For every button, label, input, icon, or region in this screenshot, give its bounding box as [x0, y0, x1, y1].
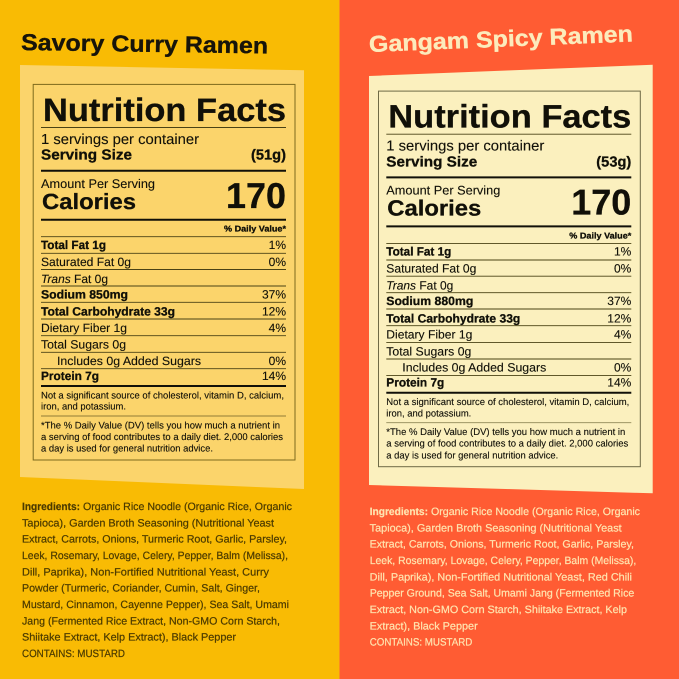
ingredients: Jang (Fermented Rice Extract, Non-GMO Corn Starch, [22, 615, 280, 627]
ingredients: Leek, Rosemary, Lovage, Celery, Pepper, Balm (Melissa), [370, 555, 636, 567]
nutrient rows: 12% [607, 311, 632, 325]
nutrition facts label [33, 84, 295, 460]
footnote: nutrients [386, 397, 629, 419]
footnote: daily value: a day is used for general nutrition advice. [41, 444, 213, 455]
ingredients: Extract, Non-GMO Corn Starch, Shiitake Extract, Kelp [370, 604, 627, 616]
nutrient rows: Sodium 880mg [386, 294, 473, 308]
footnote: daily value [41, 420, 283, 455]
ingredients: Extract), Black Pepper [370, 620, 478, 632]
ingredients: Organic Rice Noodle (Organic Rice, Organic [83, 501, 293, 513]
title: Savory Curry Ramen: Savory Curry Ramen [21, 29, 268, 58]
daily value header: % Daily Value* [569, 230, 632, 240]
ingredients: Powder (Turmeric, Coriander, Cumin, Salt, Ginger, [22, 583, 260, 595]
footnote: daily value: *The % Daily Value (DV) tells you how much a nutrient in [386, 427, 625, 438]
nutrient rows [41, 238, 286, 383]
nutrient rows: Includes 0g Added Sugars [57, 354, 201, 368]
footnote: nutrients: Not a significant source of cholesterol, vitamin D, calcium, [386, 397, 629, 408]
ingredients: Mustard, Cinnamon, Cayenne Pepper), Sea Salt, Umami [22, 599, 289, 611]
heading: Nutrition Facts: Nutrition Facts [43, 92, 286, 128]
footnote: daily value: a day is used for general nutrition advice. [386, 450, 558, 461]
footnote: daily value: *The % Daily Value (DV) tells you how much a nutrient in [41, 420, 280, 431]
ingredients: Ingredients: [370, 506, 428, 518]
calories: Amount Per Serving [41, 177, 155, 191]
footnote: nutrients: Not a significant source of cholesterol, vitamin D, calcium, [41, 390, 284, 401]
nutrient rows: 14% [262, 369, 286, 383]
footnote: nutrients: iron, and potassium. [386, 408, 471, 419]
nutrient rows: Protein 7g [41, 369, 99, 383]
calories [41, 175, 286, 216]
nutrient rows: Total Sugars 0g [41, 338, 126, 352]
nutrient rows: Dietary Fiber 1g [386, 328, 472, 342]
serving info [41, 132, 286, 164]
footnote: daily value: a serving of food contributes to a daily diet. 2,000 calories [41, 432, 283, 443]
panel: Gangam Spicy Ramen [340, 0, 679, 679]
panel: Savory Curry Ramen [0, 0, 340, 679]
ingredients: Organic Rice Noodle (Organic Rice, Organic [431, 506, 641, 518]
calories: Calories [42, 189, 136, 214]
ingredients: Extract, Carrots, Onions, Turmeric Root, Garlic, Parsley, [22, 534, 287, 546]
ingredients: Shiitake Extract, Kelp Extract), Black Pepper [22, 632, 236, 644]
ingredients: Dill, Paprika), Non-Fortified Nutritional Yeast, Red Chili [370, 571, 632, 583]
nutrient rows: Saturated Fat 0g [386, 262, 476, 276]
serving info [386, 139, 631, 170]
serving info: (53g) [596, 154, 631, 170]
nutrient rows: Total Carbohydrate 33g [41, 305, 175, 319]
calories: Amount Per Serving [386, 184, 500, 198]
nutrient rows: Total Fat 1g [386, 245, 451, 259]
nutrient rows: Protein 7g [386, 376, 444, 390]
footnote: daily value: a serving of food contributes to a daily diet. 2,000 calories [386, 439, 628, 450]
ingredients [22, 501, 293, 660]
serving info: 1 servings per container [41, 132, 199, 148]
ingredients: Ingredients: [22, 501, 80, 513]
calories: 170 [571, 182, 631, 223]
footnote: daily value [386, 427, 628, 461]
heading: Nutrition Facts: Nutrition Facts [388, 99, 631, 135]
nutrient rows [386, 245, 632, 390]
footnote: nutrients [41, 390, 284, 413]
nutrient rows: 0% [614, 262, 632, 276]
nutrient rows: Includes 0g Added Sugars [402, 361, 546, 375]
nutrient rows: Saturated Fat 0g [41, 255, 131, 269]
calories: Calories [387, 196, 481, 221]
nutrition facts label [378, 91, 640, 467]
serving info: 1 servings per container [386, 139, 544, 155]
footnote: nutrients: iron, and potassium. [41, 402, 126, 413]
nutrient rows: Dietary Fiber 1g [41, 321, 127, 335]
nutrient rows: Trans Fat 0g [41, 272, 108, 286]
nutrient rows: Total Sugars 0g [386, 344, 471, 358]
nutrient rows: 14% [607, 376, 632, 390]
nutrient rows: 37% [607, 294, 632, 308]
nutrient rows: 4% [269, 321, 286, 335]
nutrient rows: 1% [269, 238, 286, 252]
label background [20, 65, 304, 489]
ingredients: Extract, Carrots, Onions, Turmeric Root, Garlic, Parsley, [370, 539, 634, 551]
nutrient rows: Total Carbohydrate 33g [386, 311, 520, 325]
calories: 170 [226, 175, 286, 216]
label background [369, 65, 653, 493]
ingredients: Tapioca), Garden Broth Seasoning (Nutritional Yeast [22, 517, 274, 529]
ingredients: Tapioca), Garden Broth Seasoning (Nutritional Yeast [370, 522, 622, 534]
nutrient rows: 0% [269, 354, 286, 368]
serving info: (51g) [251, 148, 286, 164]
ingredients [370, 506, 641, 649]
ingredients: CONTAINS: MUSTARD [22, 648, 125, 660]
nutrient rows: 37% [262, 287, 286, 301]
nutrient rows: Total Fat 1g [41, 238, 106, 252]
nutrient rows: 0% [269, 255, 286, 269]
ingredients: Dill, Paprika), Non-Fortified Nutritional Yeast, Curry [22, 566, 270, 578]
ingredients: CONTAINS: MUSTARD [370, 637, 473, 649]
nutrient rows: Sodium 850mg [41, 287, 128, 301]
nutrient rows: Trans Fat 0g [386, 279, 453, 293]
calories [386, 182, 631, 223]
nutrient rows: 12% [262, 305, 286, 319]
nutrient rows: 4% [614, 328, 632, 342]
nutrient rows: 0% [614, 361, 632, 375]
serving info: Serving Size [386, 154, 477, 170]
title: Gangam Spicy Ramen: Gangam Spicy Ramen [368, 20, 633, 57]
daily value header: % Daily Value* [224, 224, 287, 234]
ingredients: Pepper Ground, Sea Salt, Umami Jang (Fermented Rice [370, 588, 634, 600]
ingredients: Leek, Rosemary, Lovage, Celery, Pepper, Balm (Melissa), [22, 550, 288, 562]
serving info: Serving Size [41, 148, 132, 164]
nutrient rows: 1% [614, 245, 632, 259]
